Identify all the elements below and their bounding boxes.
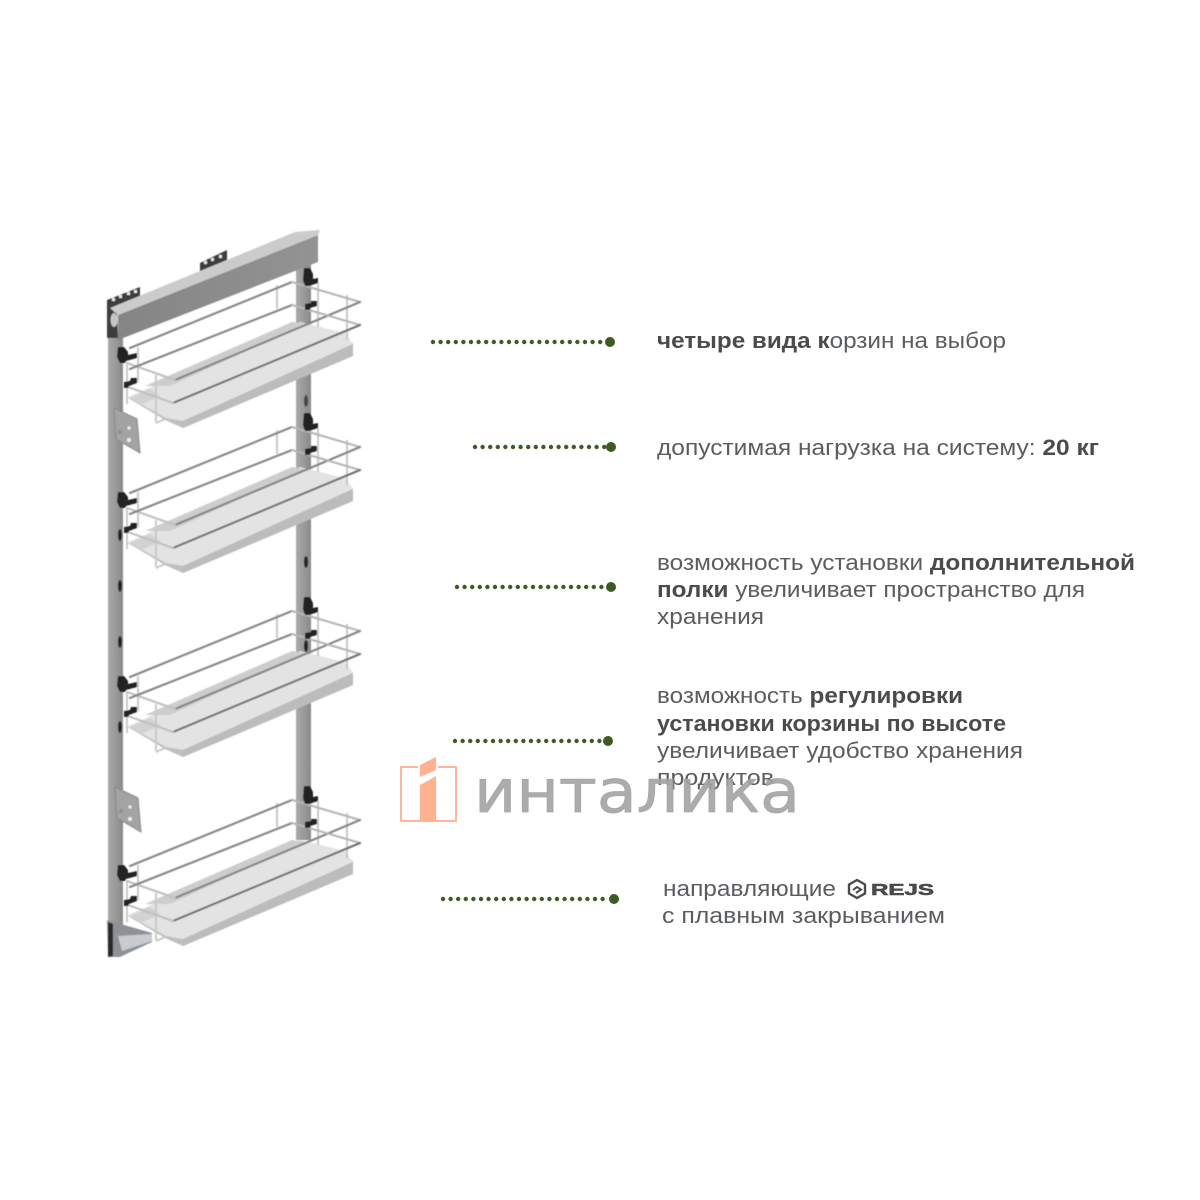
icon: REJS logo xyxy=(849,880,934,899)
post slots xyxy=(118,395,308,733)
text: soft-close runners: направляющие xyxy=(663,876,836,901)
basket 2 xyxy=(117,413,360,573)
text: height adjustment: продуктов xyxy=(657,765,774,790)
text: height adjustment: возможность регулировки xyxy=(657,683,963,708)
text: height adjustment: установки корзины по высоте xyxy=(657,711,1006,736)
mounting plates xyxy=(114,408,140,453)
text: soft-close runners: с плавным закрыванием xyxy=(662,903,945,928)
watermark: company name: инталика xyxy=(474,757,800,827)
text: load capacity: допустимая нагрузка на систему: 20 кг xyxy=(657,435,1099,460)
basket 3 xyxy=(117,597,360,757)
right post xyxy=(296,262,311,840)
top bracket left xyxy=(107,287,140,338)
text: height adjustment: увеличивает удобство хранения xyxy=(657,738,1023,763)
text: extra shelf: возможность установки дополнительной xyxy=(657,550,1135,575)
text: basket types: четыре вида к орзин на выбор xyxy=(657,328,1006,353)
basket 1 xyxy=(117,268,360,428)
icon: REJS logo: REJS xyxy=(871,882,934,899)
leader 4 xyxy=(455,736,613,746)
text: extra shelf xyxy=(657,550,1135,629)
leader 1 xyxy=(433,337,615,347)
top beam xyxy=(118,235,318,340)
top bracket middle xyxy=(200,250,227,272)
icon: pull-out basket rack xyxy=(107,230,360,957)
left post xyxy=(108,338,123,926)
text: soft-close runners xyxy=(662,876,945,928)
text: height adjustment xyxy=(657,683,1023,790)
leader 2 xyxy=(475,442,616,452)
bottom runner xyxy=(107,920,152,957)
text: extra shelf: хранения xyxy=(657,604,764,629)
text: extra shelf: полки увеличивает пространство для xyxy=(657,577,1085,602)
basket 4 xyxy=(117,786,360,946)
watermark: logo mark xyxy=(401,757,456,821)
leader 5 xyxy=(443,894,619,904)
leader 3 xyxy=(457,582,616,592)
